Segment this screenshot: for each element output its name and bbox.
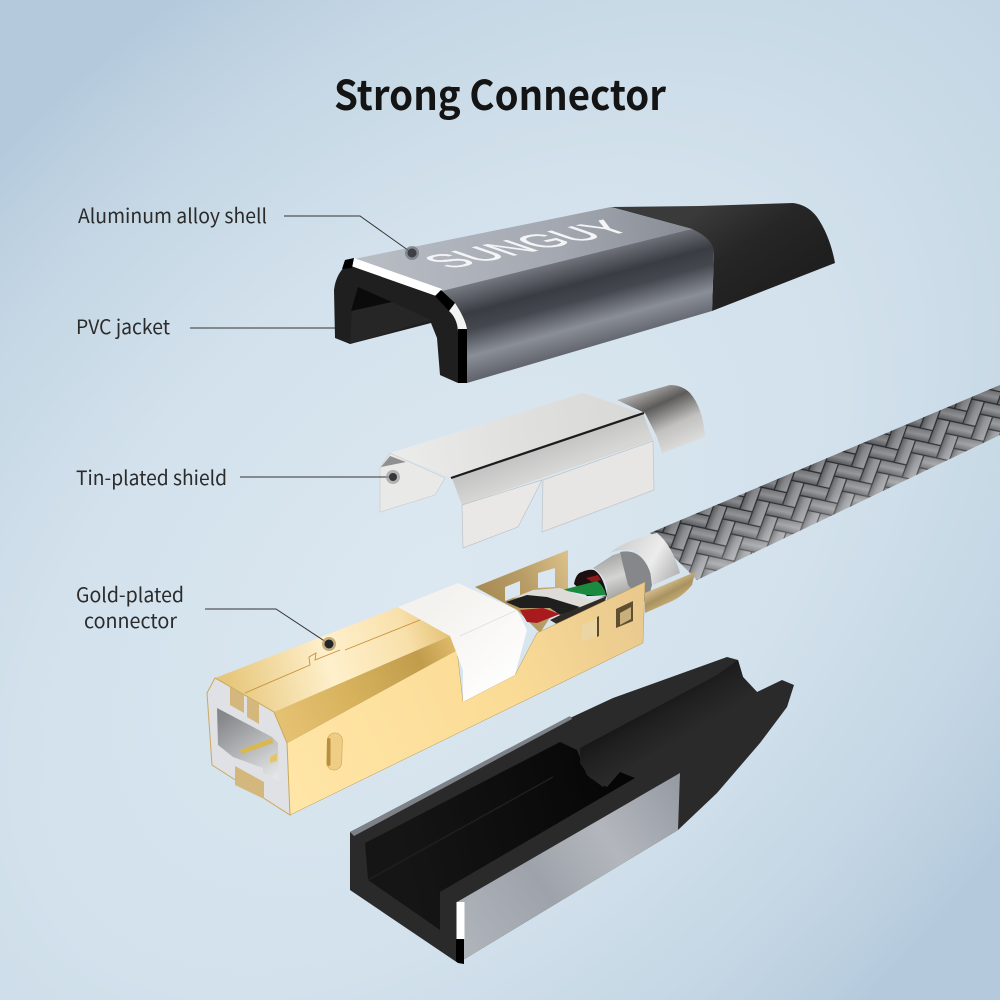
shield collar: [617, 385, 705, 453]
side wall: [287, 582, 645, 815]
label: gold-plated connector: connector: [84, 605, 177, 634]
ferrule hole: [574, 570, 607, 596]
shield flap 1: [462, 480, 542, 548]
label: gold-plated connector: Gold-plated: [76, 579, 184, 608]
braid cavity: [620, 551, 652, 603]
shell side face: [442, 229, 714, 383]
lower jacket body: [350, 657, 794, 963]
shield left flap: [380, 453, 445, 512]
rubber strain relief: [611, 203, 835, 311]
collar ring: [610, 533, 680, 585]
shield band: [452, 413, 653, 505]
panel: lower jacket: [350, 657, 794, 964]
top face: [215, 607, 450, 712]
label: tin-plated shield: [76, 462, 400, 491]
shield flap 2: [542, 441, 654, 532]
label: gold-plated connector: [76, 579, 336, 651]
cable channel: [580, 660, 758, 787]
panel: braided cable: [650, 385, 1000, 580]
metal ferrule: [593, 553, 634, 603]
chrome edge: [456, 902, 464, 939]
gray plate: [457, 773, 680, 960]
title: Strong Connector: [334, 62, 666, 122]
side slot: [326, 733, 343, 770]
side windows: [582, 618, 598, 642]
shield top: [390, 393, 642, 478]
label: aluminum alloy shell: Aluminum alloy shell: [78, 200, 267, 229]
front face: [207, 678, 290, 815]
gold pads: [230, 687, 244, 713]
label: tin-plated shield: Tin-plated shield: [76, 462, 227, 491]
panel: tin-plated shield: [380, 385, 705, 548]
port opening: [217, 708, 279, 781]
shell top face: [354, 207, 692, 301]
chrome edge: [351, 258, 442, 297]
wires: [562, 581, 606, 595]
bevel: [274, 636, 457, 743]
white wrap: [398, 583, 527, 702]
port pins: [240, 738, 273, 754]
label: PVC jacket: PVC jacket: [76, 311, 170, 340]
shield seam: [451, 413, 644, 478]
gold tail: [645, 572, 695, 613]
back gold wall: [475, 550, 568, 633]
inner recess: [365, 742, 635, 930]
seam line: [245, 620, 420, 693]
panel: aluminum shell part: [334, 203, 835, 383]
panel: gold-plated connector: [207, 533, 695, 815]
wire cavity: [550, 595, 607, 626]
front jacket: [334, 262, 458, 383]
brand text: SUNGUY: [409, 216, 644, 272]
label: aluminum alloy shell: [78, 200, 419, 260]
